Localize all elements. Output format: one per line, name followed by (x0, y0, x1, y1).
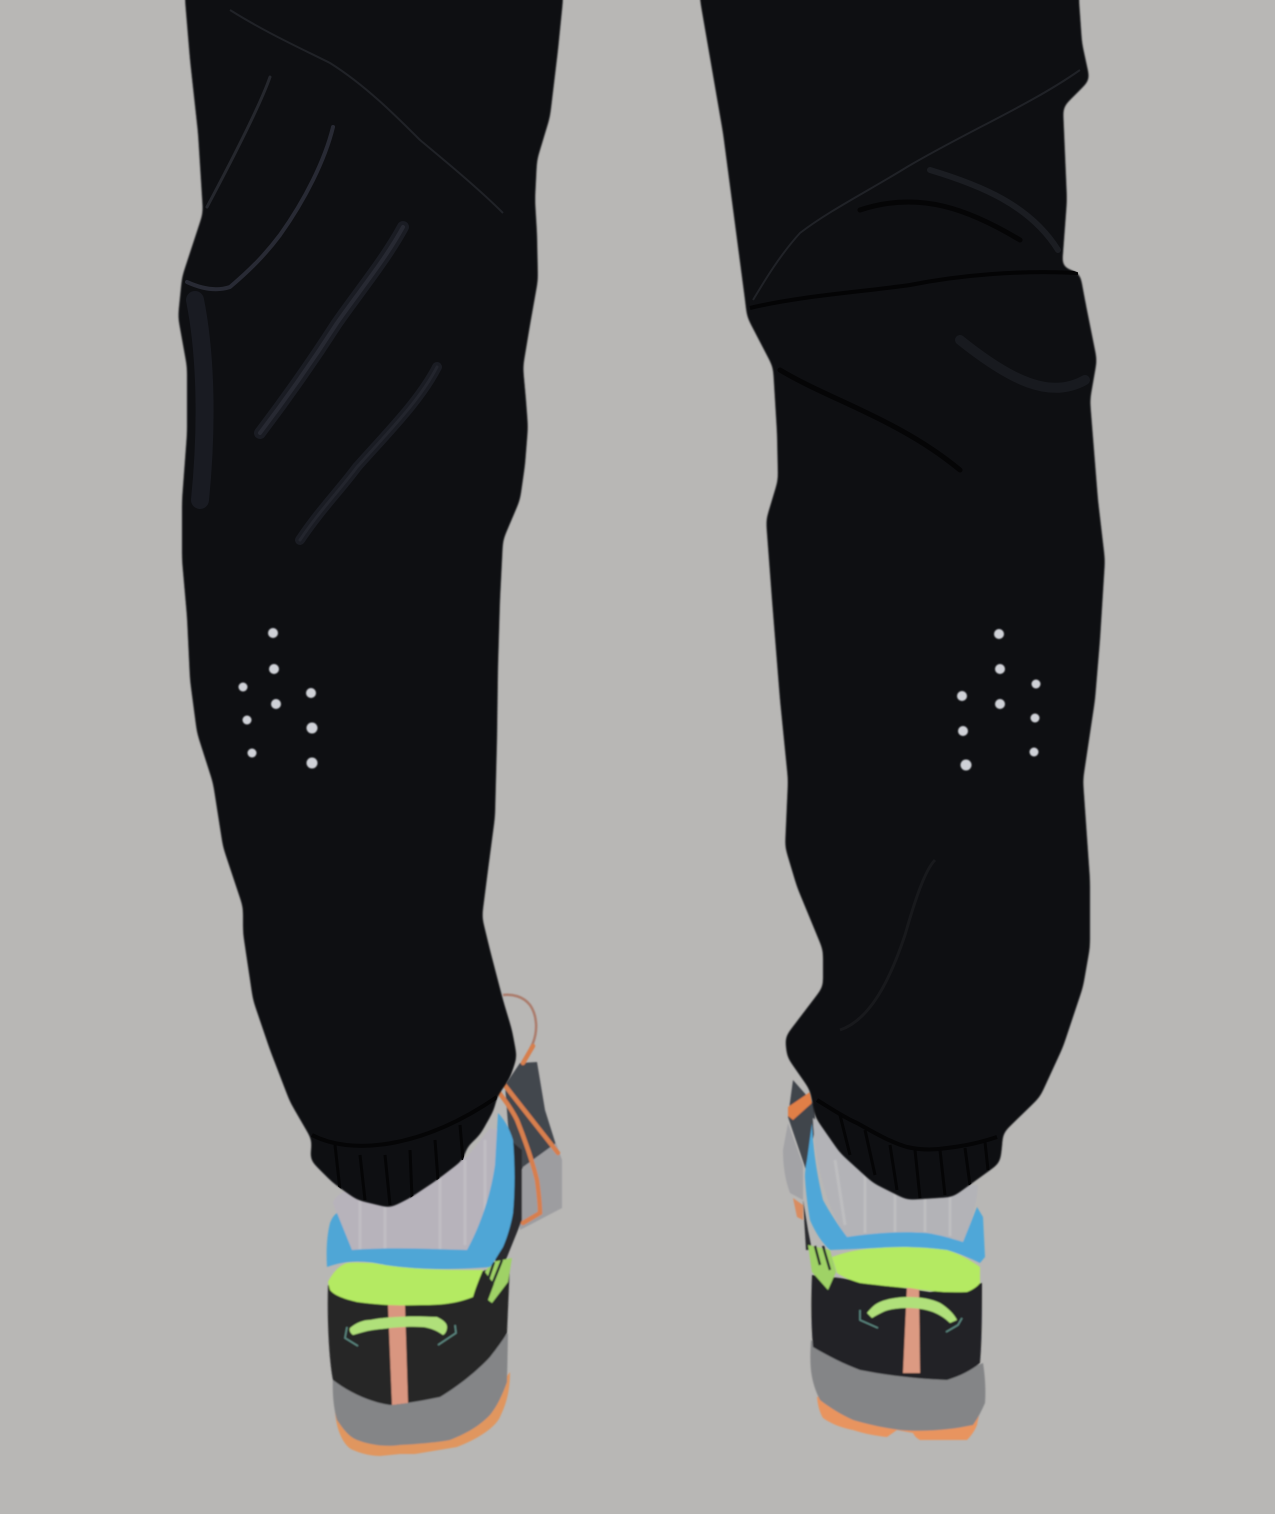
right shoe eyelets (860, 1310, 962, 1332)
left shoe sock ribs (360, 1140, 485, 1250)
left shoe orange sole (335, 1372, 510, 1456)
right shoe (783, 1080, 985, 1440)
right shoe black upper (811, 1275, 982, 1380)
left shoe eyelets (345, 1325, 456, 1346)
right shoe sock ribs (835, 1160, 950, 1236)
left trouser leg (178, 0, 563, 1208)
right shoe blue collar (805, 1123, 985, 1263)
right shoe forefoot (788, 1080, 815, 1170)
left shoe blue collar (327, 1113, 514, 1269)
right leg knee fold line (750, 272, 1078, 308)
left shoe lace loop (503, 995, 536, 1063)
left shoe grey toe area (515, 1143, 562, 1230)
right shoe pink heel strip (903, 1286, 920, 1373)
right shoe sock (813, 1118, 978, 1244)
left leg fold highlights (187, 77, 437, 540)
left shoe black upper (328, 1262, 510, 1405)
left shoe side stripes (485, 1258, 512, 1303)
left shoe grey midsole (333, 1333, 508, 1446)
left shoe (327, 995, 562, 1456)
illustration: black trousers and trail shoes, rear view (177, 0, 1106, 1457)
right leg base fabric (700, 0, 1105, 1200)
right shoe lime heel tab (832, 1247, 980, 1292)
right reflective dots (957, 629, 1040, 770)
right cuff gathers (817, 1100, 997, 1149)
left shoe orange laces (497, 1046, 558, 1223)
right shoe orange sole (817, 1395, 980, 1440)
right shoe lime heel loop (867, 1297, 957, 1323)
left leg seam (230, 10, 503, 213)
left shoe dark side strip (495, 1140, 522, 1262)
left cuff gathers (335, 1125, 463, 1205)
right shoe grey toe area (783, 1123, 803, 1200)
left shoe lime heel tab (328, 1263, 483, 1305)
right shoe grey midsole (810, 1340, 985, 1431)
right trouser leg (700, 0, 1105, 1200)
left reflective dots (238, 628, 318, 768)
left shoe pink heel strip (388, 1305, 408, 1405)
right shoe orange side detail (793, 1198, 803, 1220)
right shoe orange lace (788, 1092, 812, 1120)
right shoe side stripes (808, 1245, 836, 1290)
right leg calf fold (840, 860, 935, 1030)
left shoe sock (333, 1128, 500, 1252)
right shoe dark side strip (803, 1200, 812, 1250)
left leg base fabric (178, 0, 563, 1208)
left shoe lime heel loop (350, 1316, 447, 1335)
right leg seam (753, 70, 1080, 300)
left shoe forefoot (505, 1062, 556, 1170)
right leg fold tones (780, 170, 1085, 470)
